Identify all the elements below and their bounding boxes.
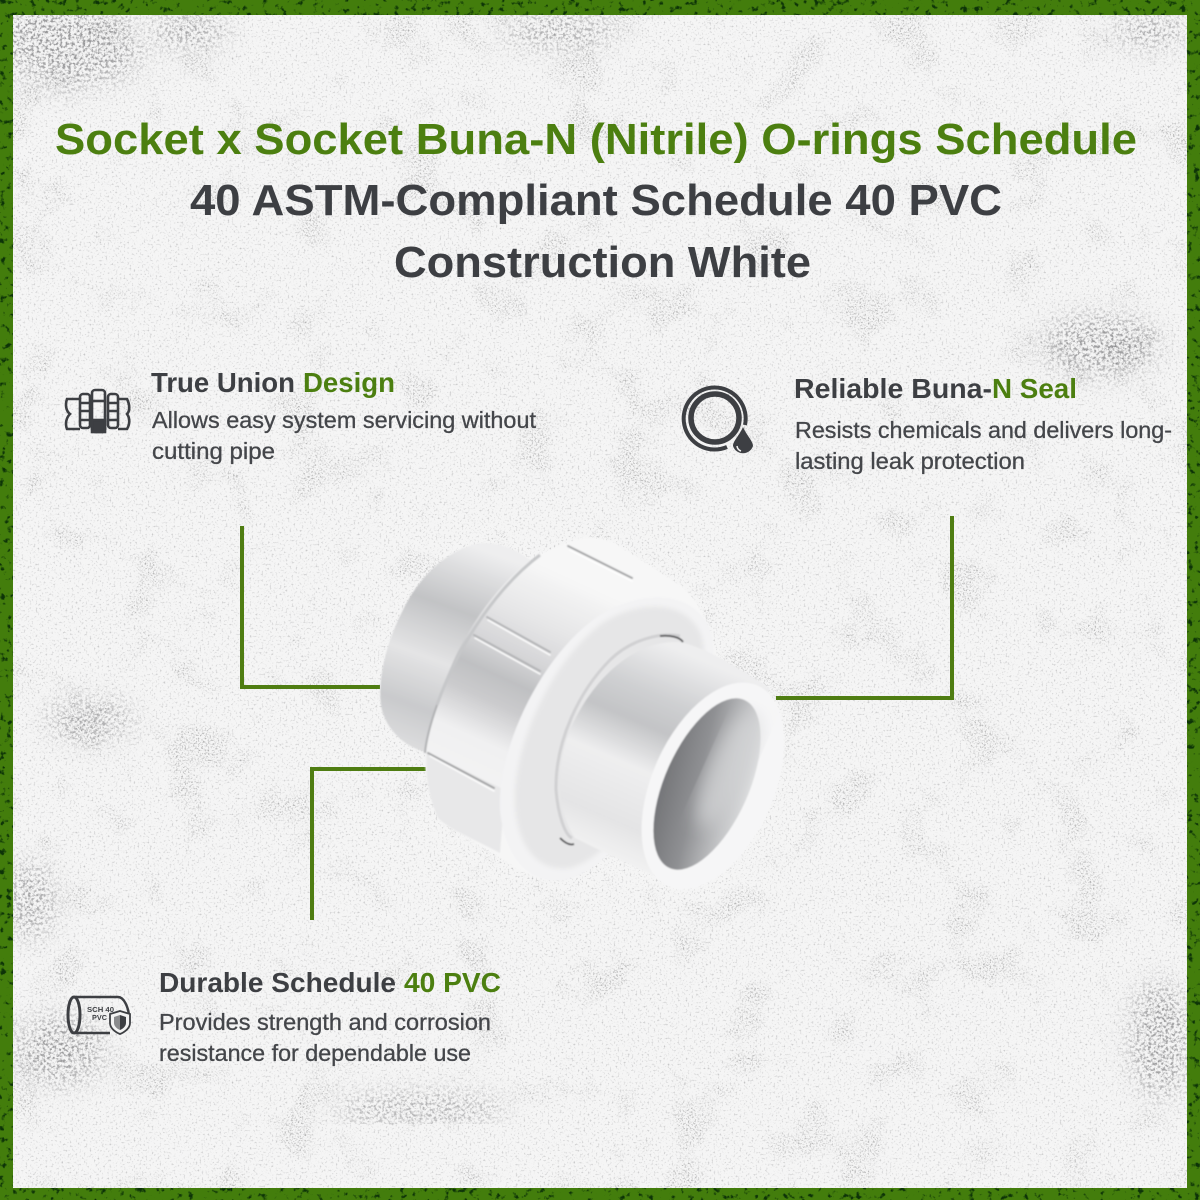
text: true union description xyxy=(152,407,537,464)
heading: durable schedule 40 pvc: 40 PVC xyxy=(404,967,501,998)
title: Construction White xyxy=(394,238,811,287)
title: 40 ASTM-Compliant Schedule 40 PVC xyxy=(190,176,1002,225)
right pipe xyxy=(560,642,770,890)
text: true union description: cutting pipe xyxy=(152,438,275,464)
icon: schedule 40 pvc pipe with shield: SCH 40 xyxy=(87,1005,114,1014)
callout line: buna-n seal xyxy=(776,516,952,698)
text: true union description: Allows easy system servicing without xyxy=(152,407,537,433)
union nut body xyxy=(425,538,715,880)
text: pvc description xyxy=(159,1009,491,1066)
icon: schedule 40 pvc pipe with shield xyxy=(68,997,130,1034)
heading: durable schedule 40 pvc: Durable Schedule xyxy=(159,967,396,998)
heading: reliable buna-n seal: Reliable Buna- xyxy=(794,373,992,404)
ribs xyxy=(428,546,632,791)
callout line: true union xyxy=(242,526,380,687)
text: buna-n description xyxy=(795,417,1172,474)
pipe bore xyxy=(631,683,783,885)
heading: durable schedule 40 pvc xyxy=(159,967,501,998)
icon: schedule 40 pvc pipe with shield: PVC xyxy=(92,1013,108,1022)
heading: reliable buna-n seal xyxy=(794,373,1077,404)
seam shadow xyxy=(556,635,680,838)
text: buna-n description: lasting leak protection xyxy=(795,448,1025,474)
heading: true union design xyxy=(151,367,395,398)
callout line: schedule 40 pvc xyxy=(312,769,426,920)
left socket xyxy=(380,543,540,752)
collar flange xyxy=(500,597,713,881)
heading: true union design: Design xyxy=(303,367,395,398)
title: Socket x Socket Buna-N (Nitrile) O-rings Schedule xyxy=(55,115,1137,164)
product photo: white pvc union xyxy=(380,538,813,911)
heading: true union design: True Union xyxy=(151,367,295,398)
heading: reliable buna-n seal: N Seal xyxy=(992,373,1077,404)
pipe end ring xyxy=(613,661,813,911)
text: buna-n description: Resists chemicals and delivers long- xyxy=(795,417,1172,443)
text: pvc description: Provides strength and corrosion xyxy=(159,1009,491,1035)
title xyxy=(55,115,1137,287)
icon: o-ring seal with drop xyxy=(684,388,753,453)
icon: true union fitting xyxy=(66,390,129,432)
text: pvc description: resistance for dependable use xyxy=(159,1040,471,1066)
